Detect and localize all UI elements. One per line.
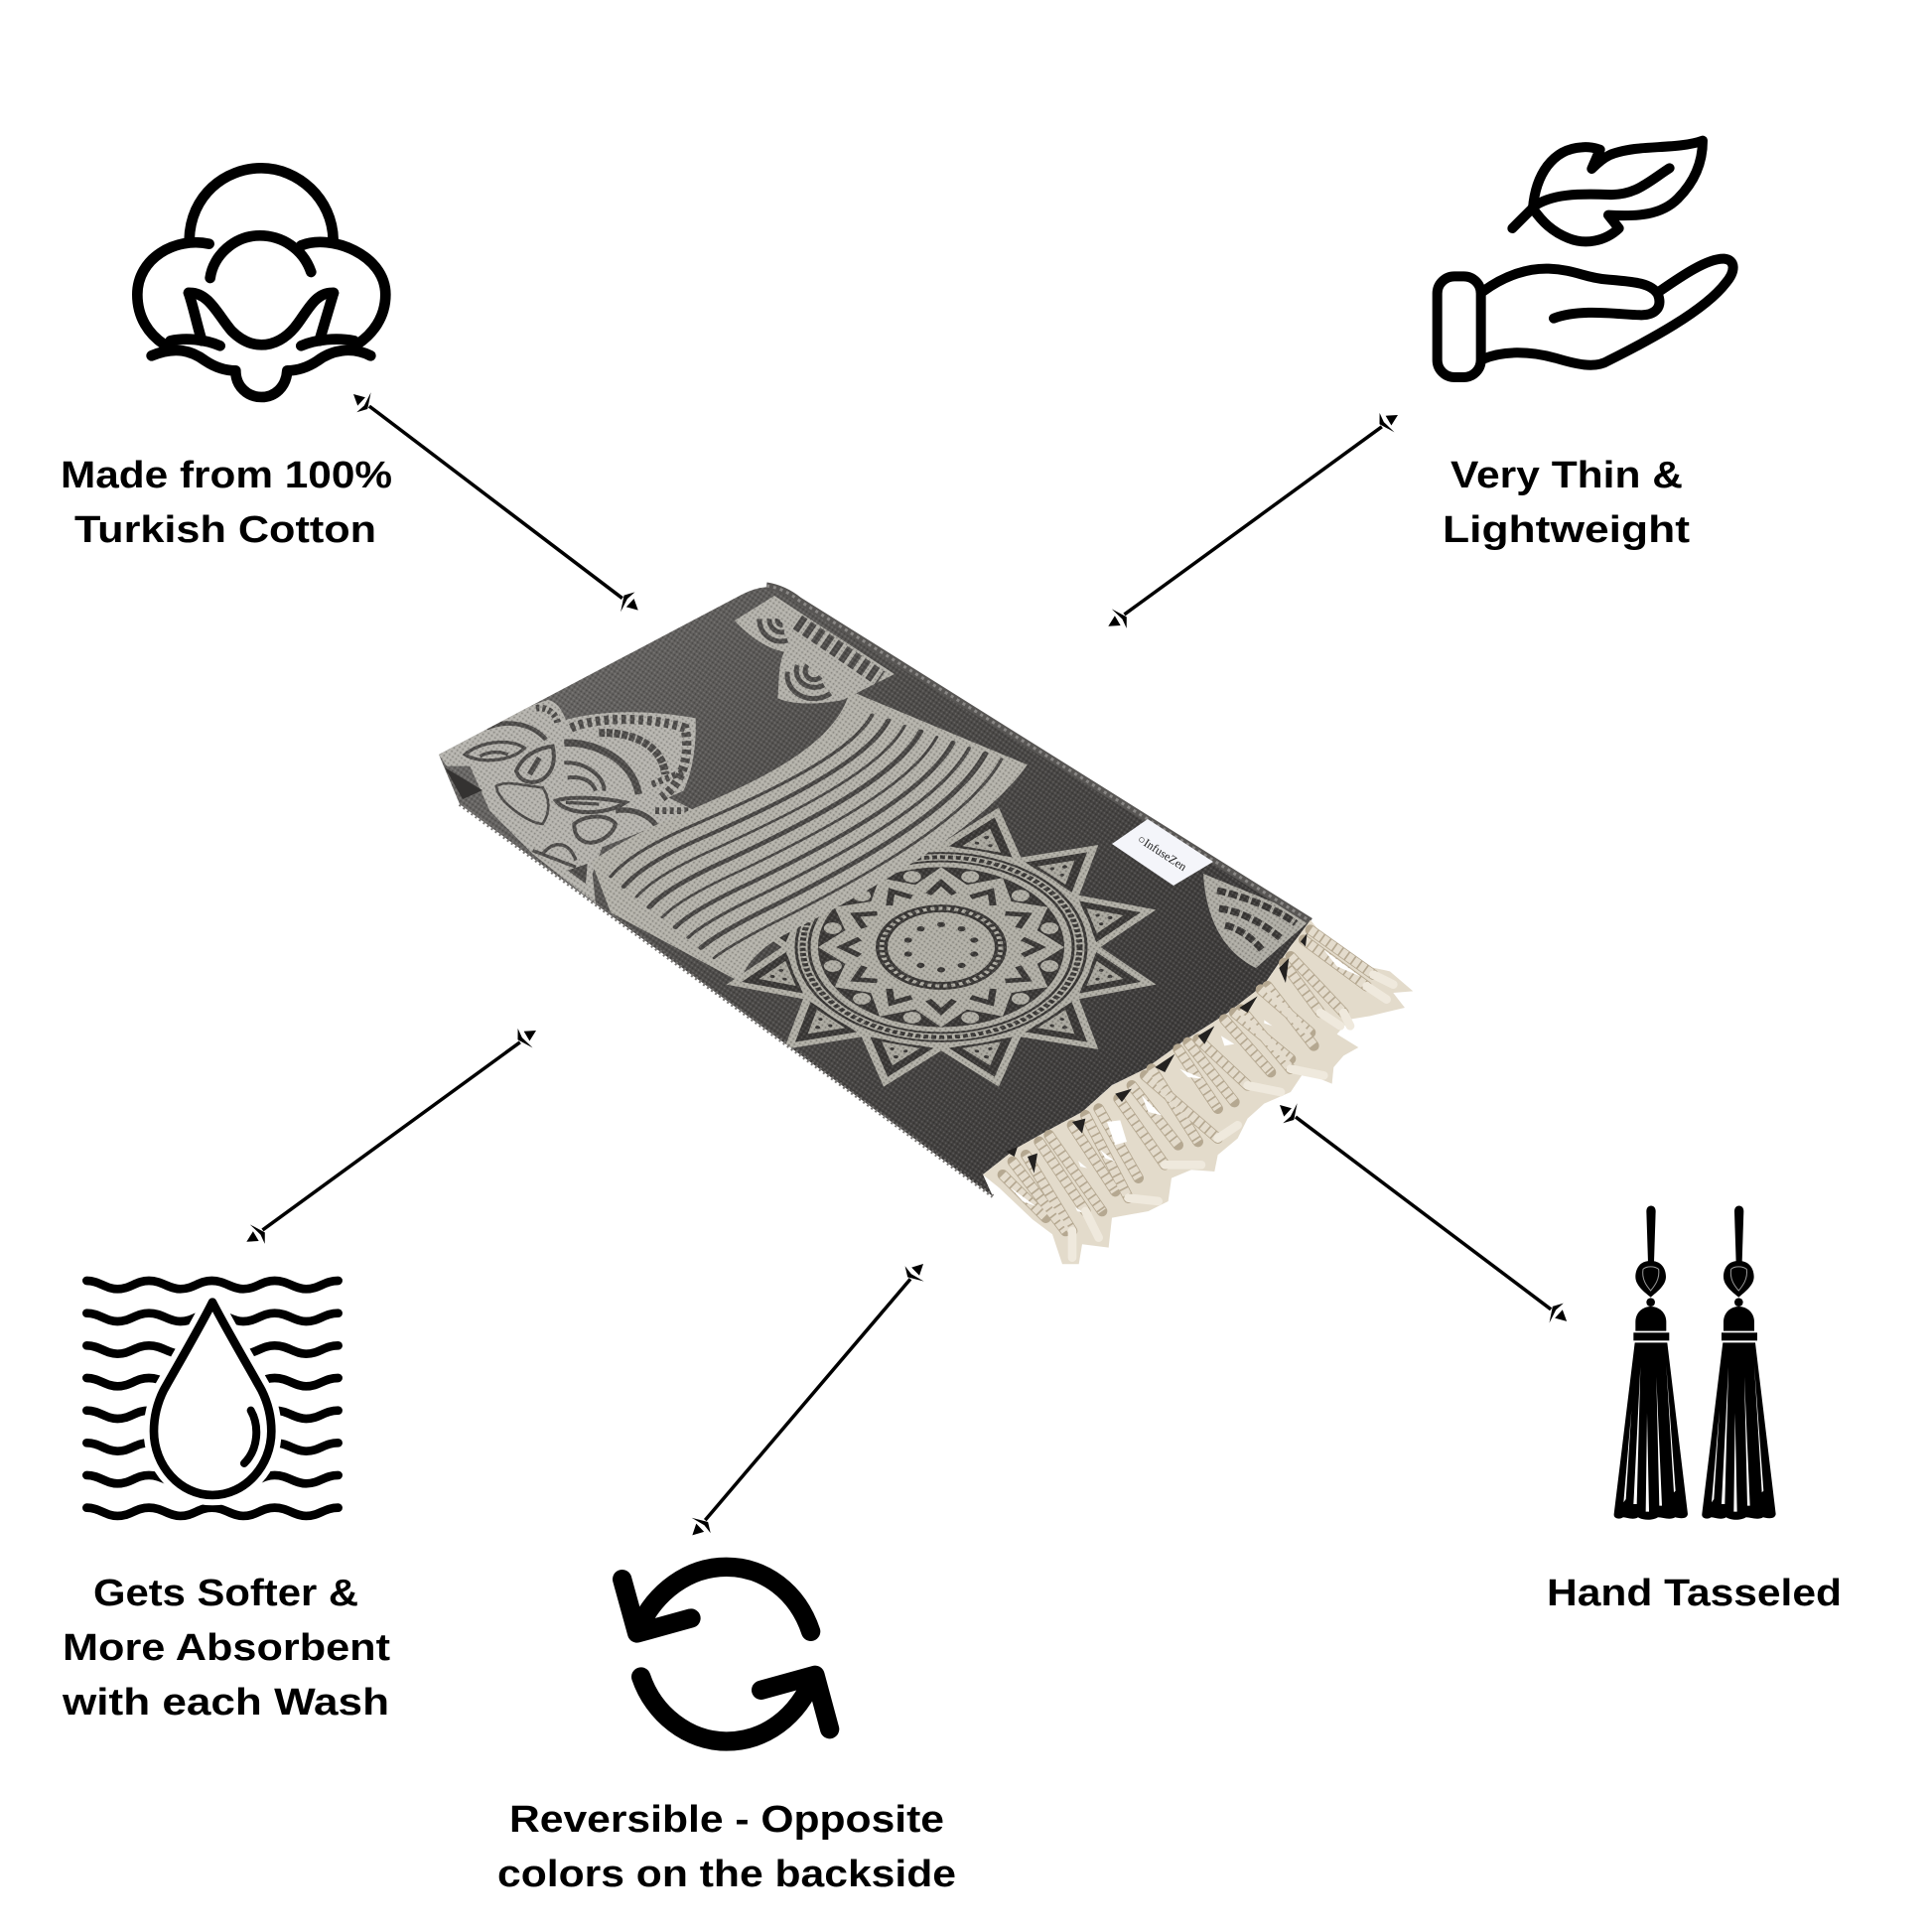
woven pattern on towel	[439, 596, 1312, 1095]
fringe holes	[1011, 950, 1360, 1213]
text: reversible: Reversible - Opposite	[509, 1799, 944, 1841]
text: made from cotton: Made from 100%	[61, 455, 392, 496]
text: very thin and lightweight: Very Thin &	[1450, 455, 1683, 496]
icon: two tassels	[1614, 1205, 1776, 1520]
selvedge edges	[460, 586, 1311, 1196]
right mandala fragment	[1203, 874, 1312, 968]
arrow: tassels to towel	[1272, 1095, 1575, 1331]
weave speckle texture	[439, 587, 1311, 1196]
icon: hand holding leaf	[1438, 141, 1733, 377]
central sun mandala	[727, 808, 1156, 1086]
text: made from cotton: Turkish Cotton	[74, 509, 376, 551]
folded edge shadow	[445, 767, 483, 799]
arrow: lightweight to towel	[1101, 405, 1405, 636]
arrow: cotton to towel	[345, 384, 645, 621]
panel: thin and lightweight	[1438, 141, 1733, 551]
panel: softer and absorbent	[62, 1281, 390, 1724]
arrow: absorbent to towel	[239, 1021, 543, 1252]
icon: water drop on waves	[86, 1281, 339, 1516]
text: softer with each wash: with each Wash	[62, 1682, 389, 1724]
icon: cotton boll	[137, 168, 385, 397]
text: softer with each wash: Gets Softer &	[93, 1573, 358, 1614]
text: softer with each wash	[62, 1573, 390, 1724]
panel: turkish cotton	[61, 168, 392, 551]
top mandala fragment	[735, 596, 895, 704]
text: reversible: colors on the backside	[497, 1854, 956, 1895]
care label: ○InfuseZen	[1135, 832, 1189, 874]
text: hand tasseled: Hand Tasseled	[1547, 1573, 1842, 1614]
text: very thin and lightweight	[1443, 455, 1690, 551]
towel fabric surface	[439, 587, 1311, 1196]
left mandala fragment	[439, 700, 696, 903]
twisted fringe tassels	[983, 920, 1413, 1264]
fringe tuft tips	[1072, 975, 1393, 1258]
panel: reversible	[497, 1567, 956, 1895]
text: made from cotton	[61, 455, 392, 551]
text: reversible	[497, 1799, 956, 1895]
striped band	[592, 691, 1028, 982]
care label	[1112, 819, 1213, 886]
text: softer with each wash: More Absorbent	[63, 1627, 390, 1669]
fringe shadow gaps	[1006, 933, 1308, 1173]
arrow: reversible to towel	[683, 1256, 933, 1544]
panel: hand tasseled	[1547, 1205, 1842, 1614]
tassel left	[1614, 1205, 1688, 1520]
text: very thin and lightweight: Lightweight	[1443, 509, 1690, 551]
towel photo illustration	[439, 586, 1413, 1264]
icon: reverse arrows	[622, 1567, 830, 1741]
